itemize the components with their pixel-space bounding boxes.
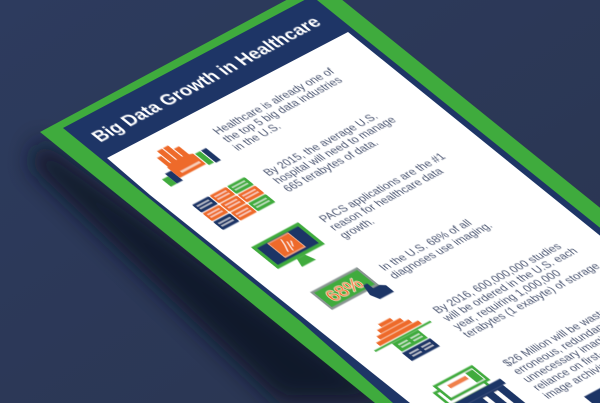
- next section bar: [584, 387, 600, 403]
- icon: hand and books: [156, 145, 222, 188]
- text block: hospital terabytes: By 2015, the average U.S.: [261, 111, 381, 178]
- text block: top 5 industries: in the U.S.: [231, 122, 284, 153]
- title: Big Data Growth in Healthcare: [87, 13, 326, 145]
- text block: studies and storage: [432, 244, 600, 338]
- icon: money in trash: [432, 364, 526, 403]
- icon: stacked data storage: [374, 318, 440, 362]
- icon: 68% card with pointer: 68%: [321, 275, 368, 305]
- background: [0, 0, 167, 110]
- text block: hospital terabytes: hospital will need to manage: [271, 115, 399, 186]
- text block: PACS applications: growth.: [337, 217, 378, 241]
- icon: monitor with x-ray: [250, 222, 326, 270]
- text block: studies and storage: year, requiring 1,000,000: [451, 268, 564, 332]
- text block: hospital terabytes: 665 terabytes of data.: [281, 138, 382, 194]
- sheet shadow: [30, 140, 400, 403]
- text block: PACS applications: reason for healthcare data: [327, 166, 447, 233]
- text block: imaging diagnoses: diagnoses use imaging.: [387, 221, 496, 281]
- text block: top 5 industries: the top 5 big data industries: [221, 75, 346, 145]
- text block: PACS applications: PACS applications are the #1: [317, 152, 449, 225]
- icon: data grid: [192, 177, 276, 230]
- white content panel: [107, 32, 600, 403]
- text block: studies and storage: will be ordered in the U.S. each: [440, 246, 581, 324]
- text block: wasted money: [502, 310, 600, 400]
- text block: studies and storage: By 2016, 600,000,000 studies: [431, 241, 565, 316]
- text block: imaging diagnoses: In the U.S. 68% of all: [377, 218, 475, 273]
- icon: 68% card with pointer: [310, 266, 394, 310]
- text block: top 5 industries: Healthcare is already one of: [211, 66, 338, 137]
